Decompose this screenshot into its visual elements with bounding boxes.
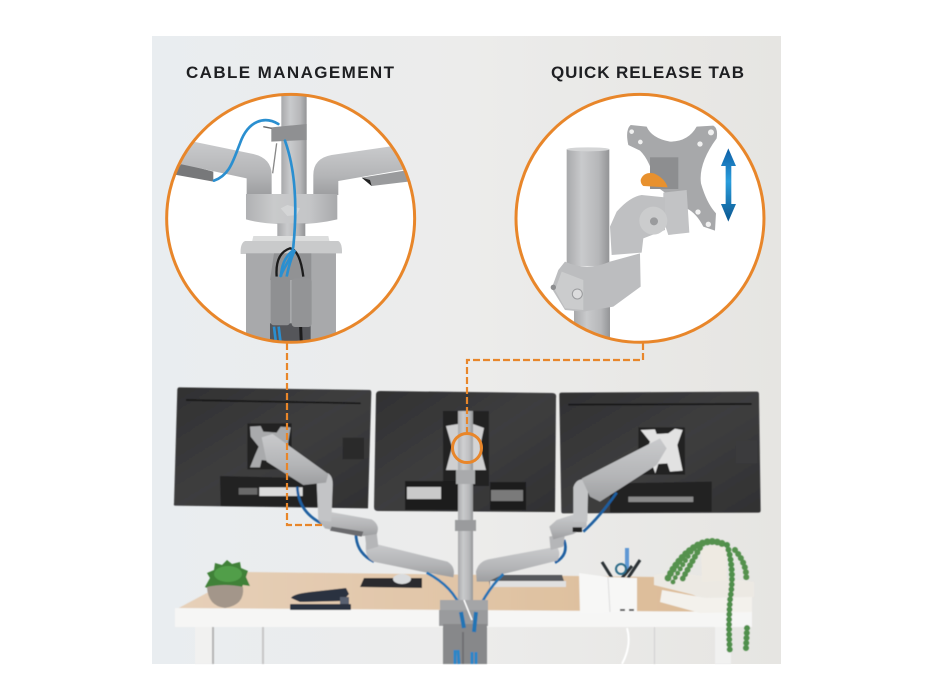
left arm <box>173 142 272 195</box>
panel: cable management circle <box>167 90 415 343</box>
knob <box>281 205 300 216</box>
upper clamp and bracket <box>263 124 307 173</box>
dashed leader: cable management <box>287 343 322 525</box>
adjustment arrow <box>721 148 736 222</box>
VESA plate <box>627 125 717 231</box>
mouse and pad <box>360 574 422 588</box>
small highlight ring on center mount <box>452 434 482 462</box>
pole clamp <box>551 253 641 312</box>
photo background wall <box>152 36 781 664</box>
monitor arm: right <box>472 438 667 625</box>
base plate <box>241 236 342 254</box>
swivel arm <box>610 195 667 255</box>
monitor: right back <box>559 392 761 513</box>
monitor arm: left <box>262 434 468 627</box>
keyboard <box>488 575 566 587</box>
pole <box>567 147 609 266</box>
heading: cable management: CABLE MANAGEMENT <box>186 63 395 82</box>
post block <box>246 253 336 343</box>
dashed leader: quick release tab <box>467 343 643 434</box>
cable clips <box>271 277 312 327</box>
clamp base and cable clips <box>439 600 488 664</box>
mount block <box>650 157 678 189</box>
heading: quick release tab: QUICK RELEASE TAB <box>551 63 744 82</box>
monitor: left back <box>174 387 371 508</box>
pen holder with USB <box>579 548 640 664</box>
upper pole <box>281 90 307 197</box>
monitor: center back <box>374 391 556 512</box>
orange quick release tab <box>641 173 668 187</box>
plant: hanging vase with vines <box>668 542 747 654</box>
bracket <box>663 190 689 235</box>
right arm <box>313 146 408 195</box>
center pole <box>455 411 476 621</box>
stapler <box>290 588 351 610</box>
panel: quick release tab circle <box>516 94 764 347</box>
desk top <box>175 572 730 612</box>
desk scene <box>174 387 761 664</box>
desk front edge <box>175 608 752 627</box>
plate holes <box>629 129 714 227</box>
books <box>654 572 754 613</box>
lower pole <box>574 307 610 347</box>
neck <box>277 223 305 237</box>
desk legs <box>195 625 731 664</box>
black cables <box>276 248 303 277</box>
cable slot <box>270 253 311 280</box>
blue cables in slot <box>274 250 295 343</box>
blue cables <box>214 120 295 276</box>
plant: left potted <box>205 560 250 608</box>
hub <box>246 194 337 224</box>
